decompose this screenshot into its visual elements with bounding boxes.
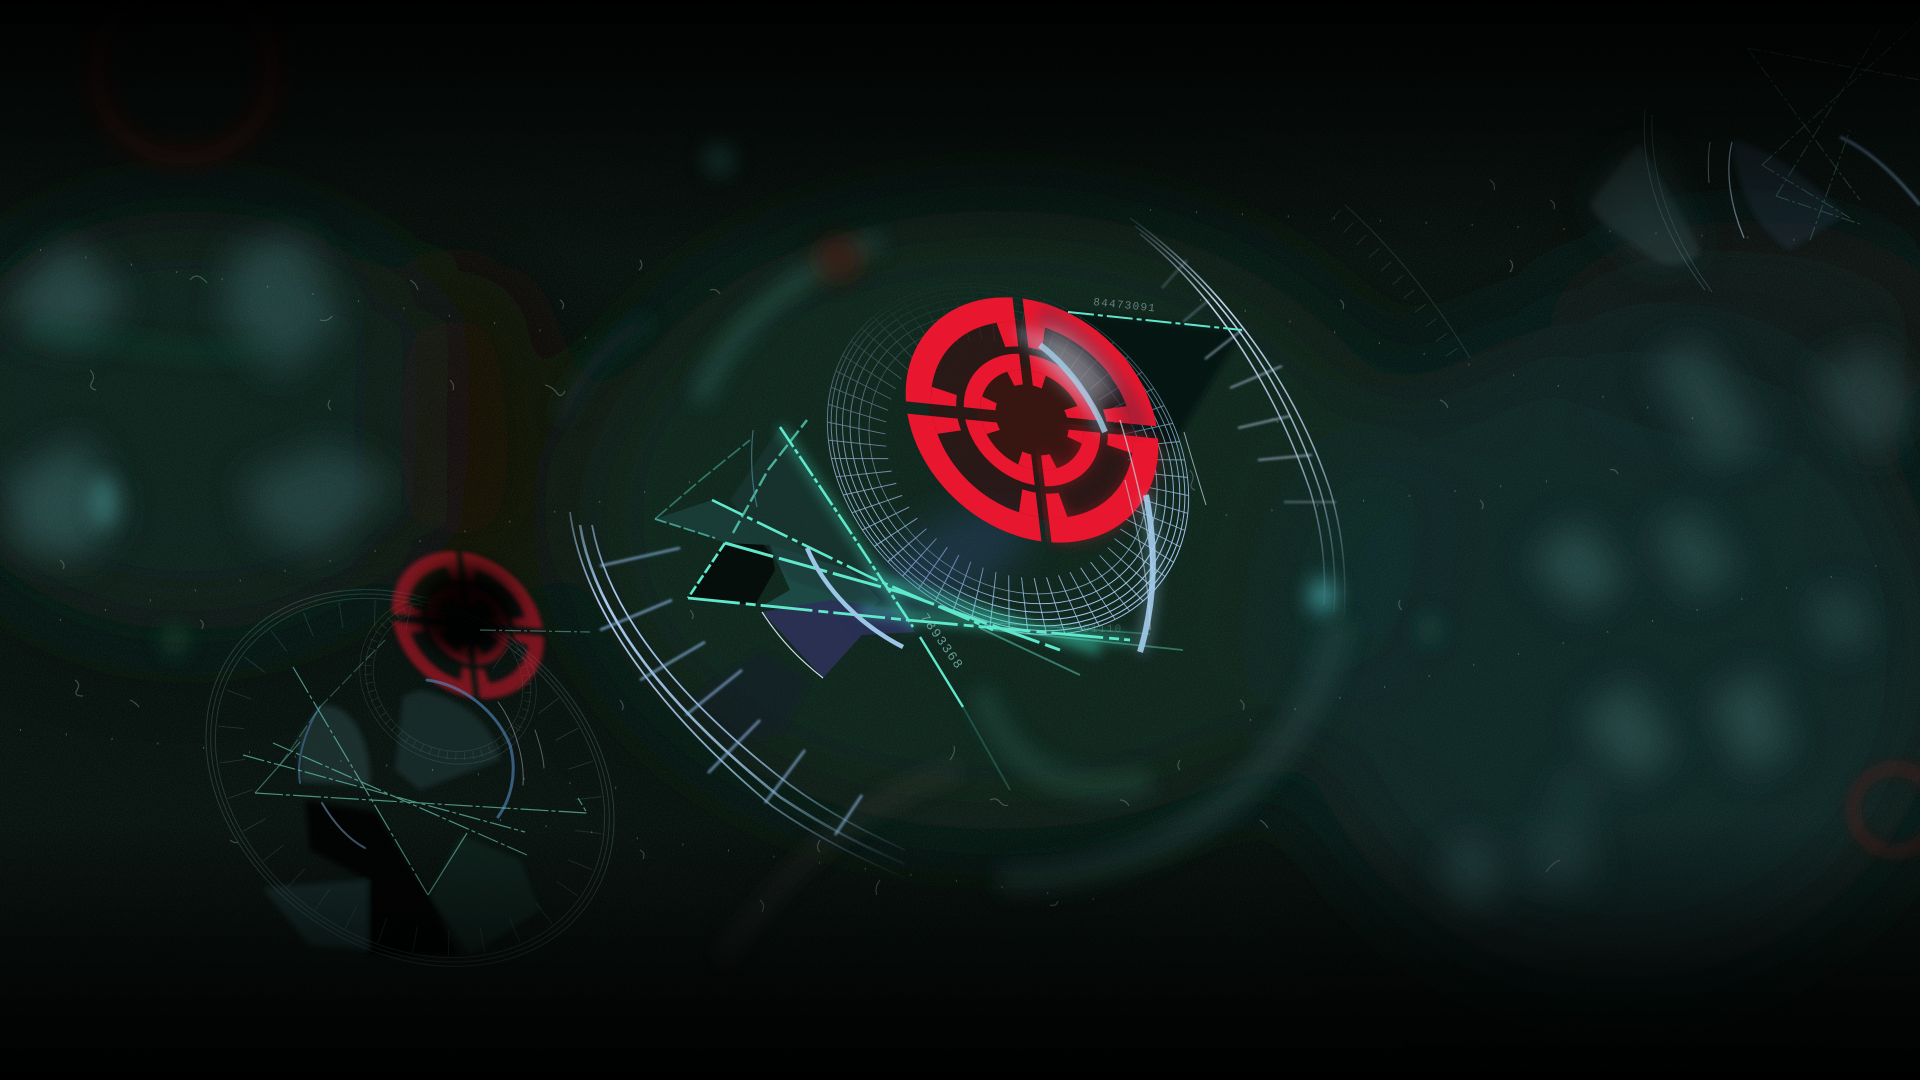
dial rings: lower left arc (570, 512, 905, 878)
small HUD: lower left (133, 512, 687, 1044)
white glare (1027, 317, 1123, 413)
line 3 (688, 598, 1130, 640)
red emblem disk tint (917, 310, 1147, 530)
central mesh sphere (826, 288, 1190, 635)
line 4 (780, 427, 913, 627)
small blue arcs (299, 680, 544, 848)
dial ticks: upper right (1162, 260, 1336, 502)
small reticle emblem (392, 552, 544, 698)
line 4 lower (920, 637, 963, 707)
top line (1068, 312, 1242, 330)
top right triangles (1747, 20, 1920, 240)
red emblem glow (906, 299, 1158, 541)
dial wedges and dark fills (655, 306, 1243, 745)
background: blurred bokeh shapes (10, 140, 1920, 910)
label: 91110: 91110 (1083, 624, 1123, 636)
faint red blob (815, 234, 863, 282)
main blue arc (1018, 330, 1206, 652)
small emblem dark core (415, 566, 515, 658)
background: bright bokeh spots (92, 143, 1444, 656)
label: 84473091: 84473091 (1093, 297, 1157, 316)
faint red ring: top left (96, 0, 272, 158)
mesh blue inner glow (852, 480, 1048, 640)
label: 7893368: 7893368 (917, 611, 966, 673)
main red reticle emblem (906, 299, 1158, 541)
small dial wedges (262, 690, 540, 955)
line glow (780, 427, 1130, 650)
upper right ruler (1335, 205, 1470, 365)
dust and scratches (20, 180, 1900, 912)
small triangle lines (243, 630, 590, 895)
line 1 (712, 500, 993, 630)
faint red ring: right edge (1853, 768, 1920, 852)
main left blue arcs (752, 430, 903, 678)
top right wedges (1590, 140, 1845, 264)
background: teal haze (0, 210, 1920, 980)
triangle edge (688, 543, 725, 598)
dial rings: upper right arc (1130, 218, 1345, 615)
main dial (570, 205, 1470, 878)
top right faint HUD (1590, 20, 1920, 292)
dial ticks: lower left (600, 548, 862, 835)
glare wash on emblem (1040, 315, 1140, 430)
main triangle dashed lines (655, 312, 1242, 790)
background: swirl strands (30, 240, 1340, 960)
small mesh (327, 562, 569, 798)
line 2 (725, 543, 1060, 650)
top right arcs (1644, 110, 1920, 292)
small dial rings (133, 512, 687, 1044)
